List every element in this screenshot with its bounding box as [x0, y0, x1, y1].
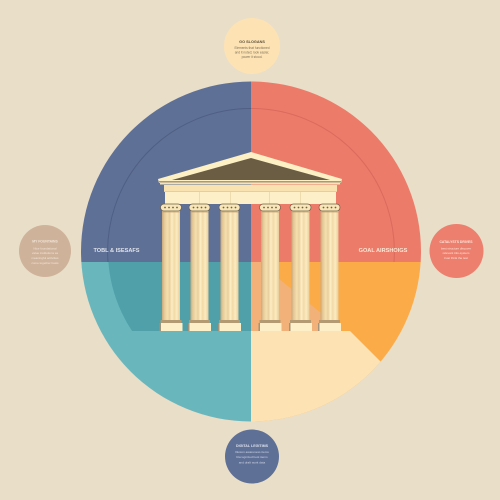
wedge: bottom right cream	[251, 331, 380, 422]
callout: left	[19, 225, 71, 277]
quadrant: bottom left teal	[81, 262, 251, 422]
callout: bottom: Recognized best items	[236, 455, 268, 459]
callout: right: trust think the test	[444, 256, 468, 260]
temple entablature	[164, 185, 337, 204]
temple columns	[160, 204, 341, 331]
callout: left: value institutions as	[32, 251, 59, 255]
callout: right	[430, 224, 484, 278]
label: right segment title: GOAL AIRSHOIGS	[359, 248, 408, 254]
quadrant: bottom right orange	[251, 262, 422, 422]
callout: bottom: Illusion awareness items	[235, 450, 269, 454]
temple roof pediment	[158, 152, 342, 184]
callout: top: Elements that functioned	[234, 46, 270, 50]
callout: left: MY FOUNTAINS	[32, 240, 58, 244]
callout: left: Nice foundational	[33, 246, 57, 250]
inner ring: coral arc	[251, 108, 394, 262]
callout: bottom	[225, 430, 279, 484]
label: left segment title: TOBL & ISESAFS	[93, 248, 140, 254]
callout: top: and it noted; look easier,	[235, 50, 270, 54]
callout: top: GO SLOGANS	[239, 40, 265, 44]
callout: right: relevant info-system	[443, 251, 470, 255]
callout: right: best structure discover	[441, 246, 471, 250]
illustration: greek temple	[158, 152, 342, 331]
callout: left: meaningful activities	[31, 256, 59, 260]
inner ring: blue arc	[108, 108, 251, 262]
callout: top	[224, 18, 280, 74]
callout: right: CATALYSTS DRIVES	[439, 240, 473, 244]
quadrant: top right coral	[251, 81, 422, 262]
inner ring: teal shade	[100, 262, 251, 331]
callout: bottom: DIGITAL LEGITIMS	[236, 444, 269, 448]
panel: central quadrant circle	[81, 81, 422, 422]
wedge: peach shadow	[251, 262, 320, 331]
callout: top: power it stood.	[242, 55, 262, 59]
callout: left: come together basis	[31, 261, 59, 265]
quadrant: top left blue	[81, 81, 251, 262]
callout: bottom: and draft work data	[239, 460, 266, 464]
